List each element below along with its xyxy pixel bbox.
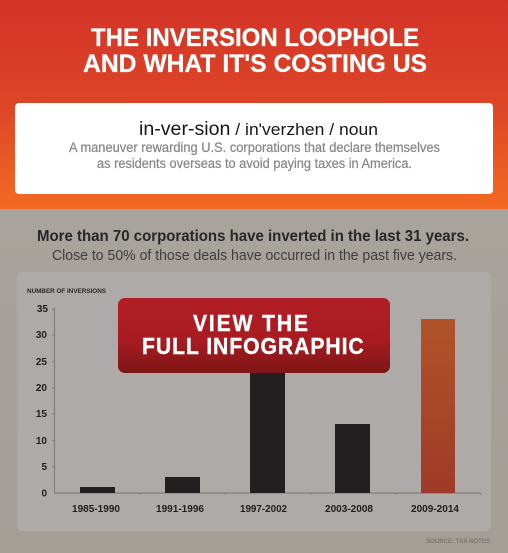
header band (0, 0, 508, 209)
y axis labels: 10 (36, 436, 47, 447)
definition card (15, 103, 493, 194)
y axis labels: 35 (37, 304, 48, 315)
y axis labels (36, 304, 48, 500)
axes (52, 308, 480, 495)
definition term: in-ver-sion / in'verzhen / noun (139, 119, 378, 140)
bars (80, 319, 455, 493)
definition text: A maneuver rewarding U.S. corporations that declare themselves (69, 140, 440, 155)
y axis labels: 25 (36, 357, 47, 368)
subheading (37, 228, 469, 264)
y axis labels: 30 (36, 330, 47, 341)
x axis labels: 1997-2002 (240, 503, 287, 515)
subheading: Close to 50% of those deals have occurred in the past five years. (52, 248, 457, 264)
title: THE INVERSION LOOPHOLE (91, 24, 419, 52)
definition text: as residents overseas to avoid paying taxes in America. (97, 156, 412, 171)
x axis labels (72, 503, 459, 515)
y axis labels: 0 (41, 488, 47, 500)
button text (142, 310, 364, 359)
gray background (0, 209, 508, 553)
call to action button (118, 298, 390, 373)
bar chart (27, 288, 480, 515)
axis title: NUMBER OF INVERSIONS (27, 288, 107, 295)
y axis labels: 15 (36, 409, 47, 420)
x axis labels: 2009-2014 (411, 503, 459, 515)
definition text (69, 140, 440, 171)
chart panel (17, 272, 491, 531)
x axis labels: 1985-1990 (72, 503, 120, 515)
x axis labels: 1991-1996 (156, 503, 204, 515)
button text: VIEW THE (193, 310, 308, 336)
x axis labels: 2003-2008 (325, 503, 373, 515)
y axis labels: 5 (41, 462, 47, 473)
title: AND WHAT IT'S COSTING US (83, 50, 427, 78)
title (83, 24, 427, 78)
source note: SOURCE: TAX NOTES (426, 538, 491, 545)
subheading: More than 70 corporations have inverted in the last 31 years. (37, 228, 469, 245)
y axis labels: 20 (36, 383, 47, 394)
button text: FULL INFOGRAPHIC (142, 333, 364, 359)
